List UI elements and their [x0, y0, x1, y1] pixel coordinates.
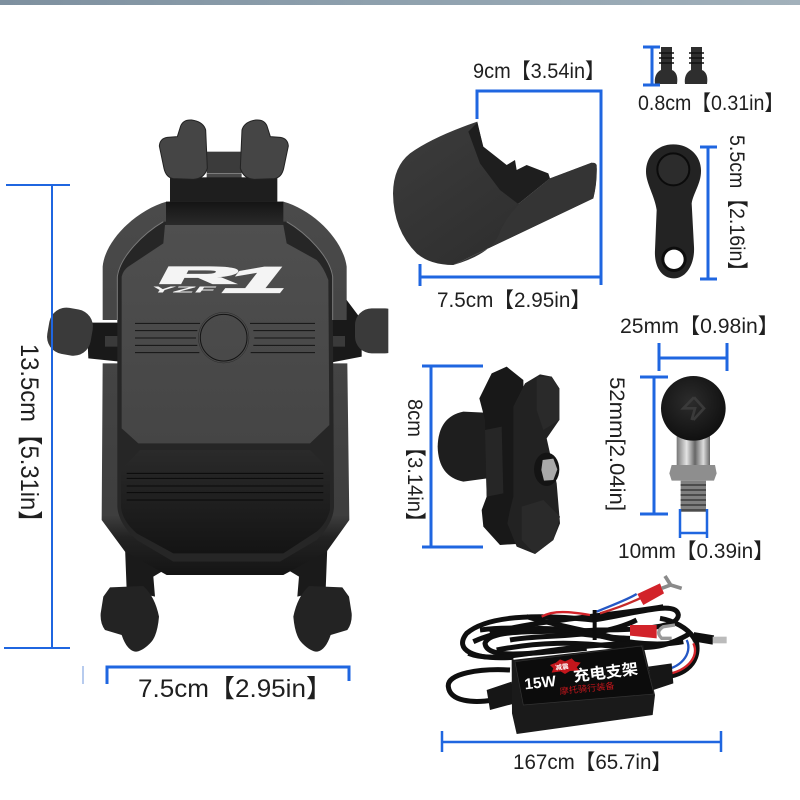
- top grip arms: [159, 120, 288, 202]
- dimension: cable length: [442, 731, 721, 774]
- dimension: shield width and depth: [420, 60, 605, 312]
- product: 15W charging cable: [448, 576, 727, 734]
- logo: YZF R1: YZF: [151, 285, 218, 295]
- dimension: ball stud: [605, 315, 779, 563]
- bolt: [541, 459, 557, 481]
- coiled wires: [448, 607, 713, 701]
- dimension: lever length: [700, 135, 748, 281]
- module box: [512, 645, 655, 734]
- label: 10mm: 10mm【0.39in】: [618, 540, 774, 563]
- red burst badge: [550, 658, 581, 674]
- barrel plug: [713, 637, 727, 643]
- strain reliefs: [487, 663, 673, 710]
- vent lines and button: [135, 312, 315, 363]
- neck band: [166, 202, 283, 226]
- dimension: screw length: [638, 47, 784, 115]
- upper panel: [122, 225, 329, 443]
- product: mounting lever: [646, 144, 701, 278]
- logo: YZF R1: R: [152, 263, 246, 289]
- colored wires: [542, 594, 695, 675]
- red terminals and forks: [630, 576, 727, 643]
- bottom grip arms: [101, 547, 352, 652]
- thread: [681, 481, 706, 512]
- product: ball stud: [661, 376, 726, 512]
- mount outer body: [102, 202, 349, 575]
- logo: YZF R1: [151, 259, 308, 301]
- label: 8cm: 8cm【3.14in】: [403, 399, 426, 532]
- module box: 15W: [524, 673, 557, 693]
- label: 0.8cm: 0.8cm【0.31in】: [638, 92, 784, 115]
- label: 25mm: 25mm【0.98in】: [620, 315, 779, 338]
- right side knob: [332, 300, 388, 362]
- label: 167cm: 167cm【65.7in】: [513, 751, 672, 774]
- front lip: [453, 163, 597, 265]
- product: main phone mount: [44, 120, 402, 652]
- dimension: mount height: [4, 185, 70, 648]
- top decorative photo strip: [0, 0, 800, 5]
- lower pad: [121, 450, 330, 553]
- label: 13.5cm: 13.5cm【5.31in】: [15, 344, 43, 534]
- module box: 摩托骑行装备: [559, 680, 615, 696]
- label: 7.5cm shield: 7.5cm【2.95in】: [437, 289, 591, 312]
- dimension: clamp length: [403, 366, 483, 547]
- label: 7.5cm: 7.5cm【2.95in】: [138, 675, 332, 703]
- dimension: mount width: [83, 666, 349, 703]
- label: 52mm: 52mm[2.04in]: [605, 377, 628, 511]
- label: 5.5cm: 5.5cm【2.16in】: [725, 135, 748, 281]
- frame highlight: [117, 222, 333, 320]
- lever hole: [664, 250, 684, 269]
- hex nut: [669, 465, 717, 481]
- inner frame: [117, 222, 334, 562]
- label: 9cm: 9cm【3.54in】: [473, 60, 605, 83]
- product: double socket clamp: [438, 367, 560, 554]
- product: screws: [655, 47, 707, 84]
- inner cavity: [468, 123, 550, 204]
- logo: YZF R1: 1: [211, 259, 308, 301]
- product: handlebar shield: [393, 122, 597, 265]
- module box: 充电支架: [572, 660, 639, 686]
- left side knob: [44, 305, 123, 362]
- module box: 减震: [555, 662, 569, 672]
